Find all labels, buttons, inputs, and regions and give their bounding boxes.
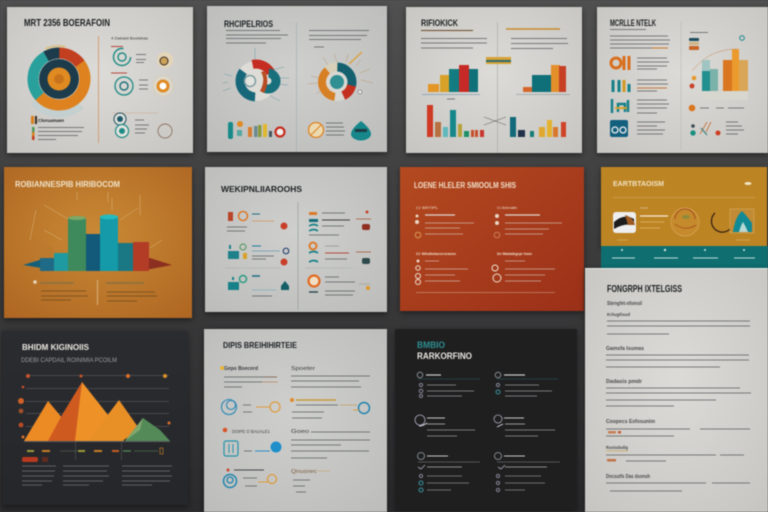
left column items	[227, 212, 289, 296]
left column steps	[220, 366, 282, 488]
panel: orange 3D bar chart sheet	[4, 167, 192, 318]
left ring chart	[223, 48, 289, 101]
icons and notes: 4 Dabald Bootsbas	[111, 36, 148, 40]
title: RHCIPELRIOS	[224, 19, 273, 29]
title: EARTBTAOISM	[613, 179, 664, 188]
panel: red checklist sheet	[400, 167, 584, 311]
right column steps: Goeo	[291, 429, 309, 435]
icon list	[610, 56, 669, 137]
right column steps	[290, 366, 370, 492]
panel: bar charts sheet	[406, 7, 582, 153]
lower right bar chart	[484, 117, 566, 137]
sketch cluster	[690, 122, 744, 136]
panel: icon list with bar chart sheet	[597, 7, 768, 153]
list groups	[415, 372, 560, 492]
3D bar chart	[23, 192, 172, 271]
donut chart	[12, 34, 106, 128]
panel: light list sheet	[205, 167, 387, 312]
text sections	[606, 301, 751, 491]
checklist columns	[415, 206, 562, 284]
right column steps: Qnusnec	[291, 469, 317, 475]
lower left bar chart	[427, 105, 484, 137]
icons and notes	[111, 36, 173, 138]
notes	[33, 280, 157, 305]
left column steps: Gepo Boecerd	[224, 366, 258, 372]
checklist columns: Cr BRTIPL	[416, 206, 438, 210]
upper right bar chart	[516, 65, 570, 94]
stacked bar chart	[689, 32, 748, 111]
text sections: Coopecs Exfosunim	[606, 419, 655, 425]
mini bar icons	[228, 121, 284, 139]
text sections: Krlugtlsud	[607, 312, 630, 317]
title: FONGRPH IXTELGISS	[607, 284, 682, 295]
panel: donut chart sheet	[7, 7, 193, 153]
checklist columns: Cr Arbrnatin	[497, 206, 517, 210]
upper left bar chart	[422, 65, 480, 99]
checklist columns: Cr Whdtetaversrame	[416, 252, 456, 256]
text sections: Dncsutfs Das dsonsh	[606, 474, 650, 480]
panel: mustard sheet with teal footer	[601, 167, 768, 268]
panel: paired pie charts sheet	[207, 6, 387, 152]
legend: Cloruamaen	[38, 118, 64, 123]
orange badge and drop	[308, 121, 371, 140]
text sections: Dadasis pmdr	[606, 379, 643, 385]
subtitle: DDEBI CAPDAIL ROINIMIA PCOILM	[21, 358, 117, 364]
right column steps: Spoeter	[291, 366, 315, 372]
checklist columns: Dn Wabialbgepr fomn	[497, 252, 532, 256]
panel: white long text sheet	[585, 268, 768, 512]
panel: black list sheet	[395, 329, 577, 510]
legend	[31, 116, 84, 140]
title: RIFIOKICK	[421, 18, 458, 28]
title: WEKIPNLIIAROOHS	[221, 184, 302, 194]
teal footer	[601, 246, 768, 268]
image tiles	[613, 208, 754, 240]
mountain chart	[18, 374, 170, 460]
title	[417, 340, 472, 361]
right ring chart	[308, 52, 373, 103]
right column items	[308, 210, 371, 295]
title: BHIDM KIGINOIIS	[22, 343, 90, 352]
title: DIPIS BREIHIHIRTEIE	[223, 340, 297, 350]
panel: dark mountain chart sheet	[2, 331, 188, 505]
text sections: Rsoisdsdig	[606, 445, 628, 450]
title: MRT 2356 BOERAFOIN	[24, 18, 110, 29]
title: LOENE HLELER SMIOOLM SHIS	[414, 181, 517, 190]
title: RARKORFINO	[417, 351, 472, 361]
notes	[22, 457, 172, 485]
left column steps: DOIPE O BAUALE1	[232, 429, 270, 434]
title: BMBIO	[417, 340, 445, 350]
panel: light steps sheet	[204, 329, 387, 512]
text sections: Sbrngfet-nfsmsil	[607, 301, 643, 307]
title: MCRLLE NTELK	[610, 18, 656, 28]
title: ROBIANNESPIB HIRIBOCOM	[15, 179, 120, 189]
text sections: Gamsfa Isumas	[606, 346, 644, 352]
